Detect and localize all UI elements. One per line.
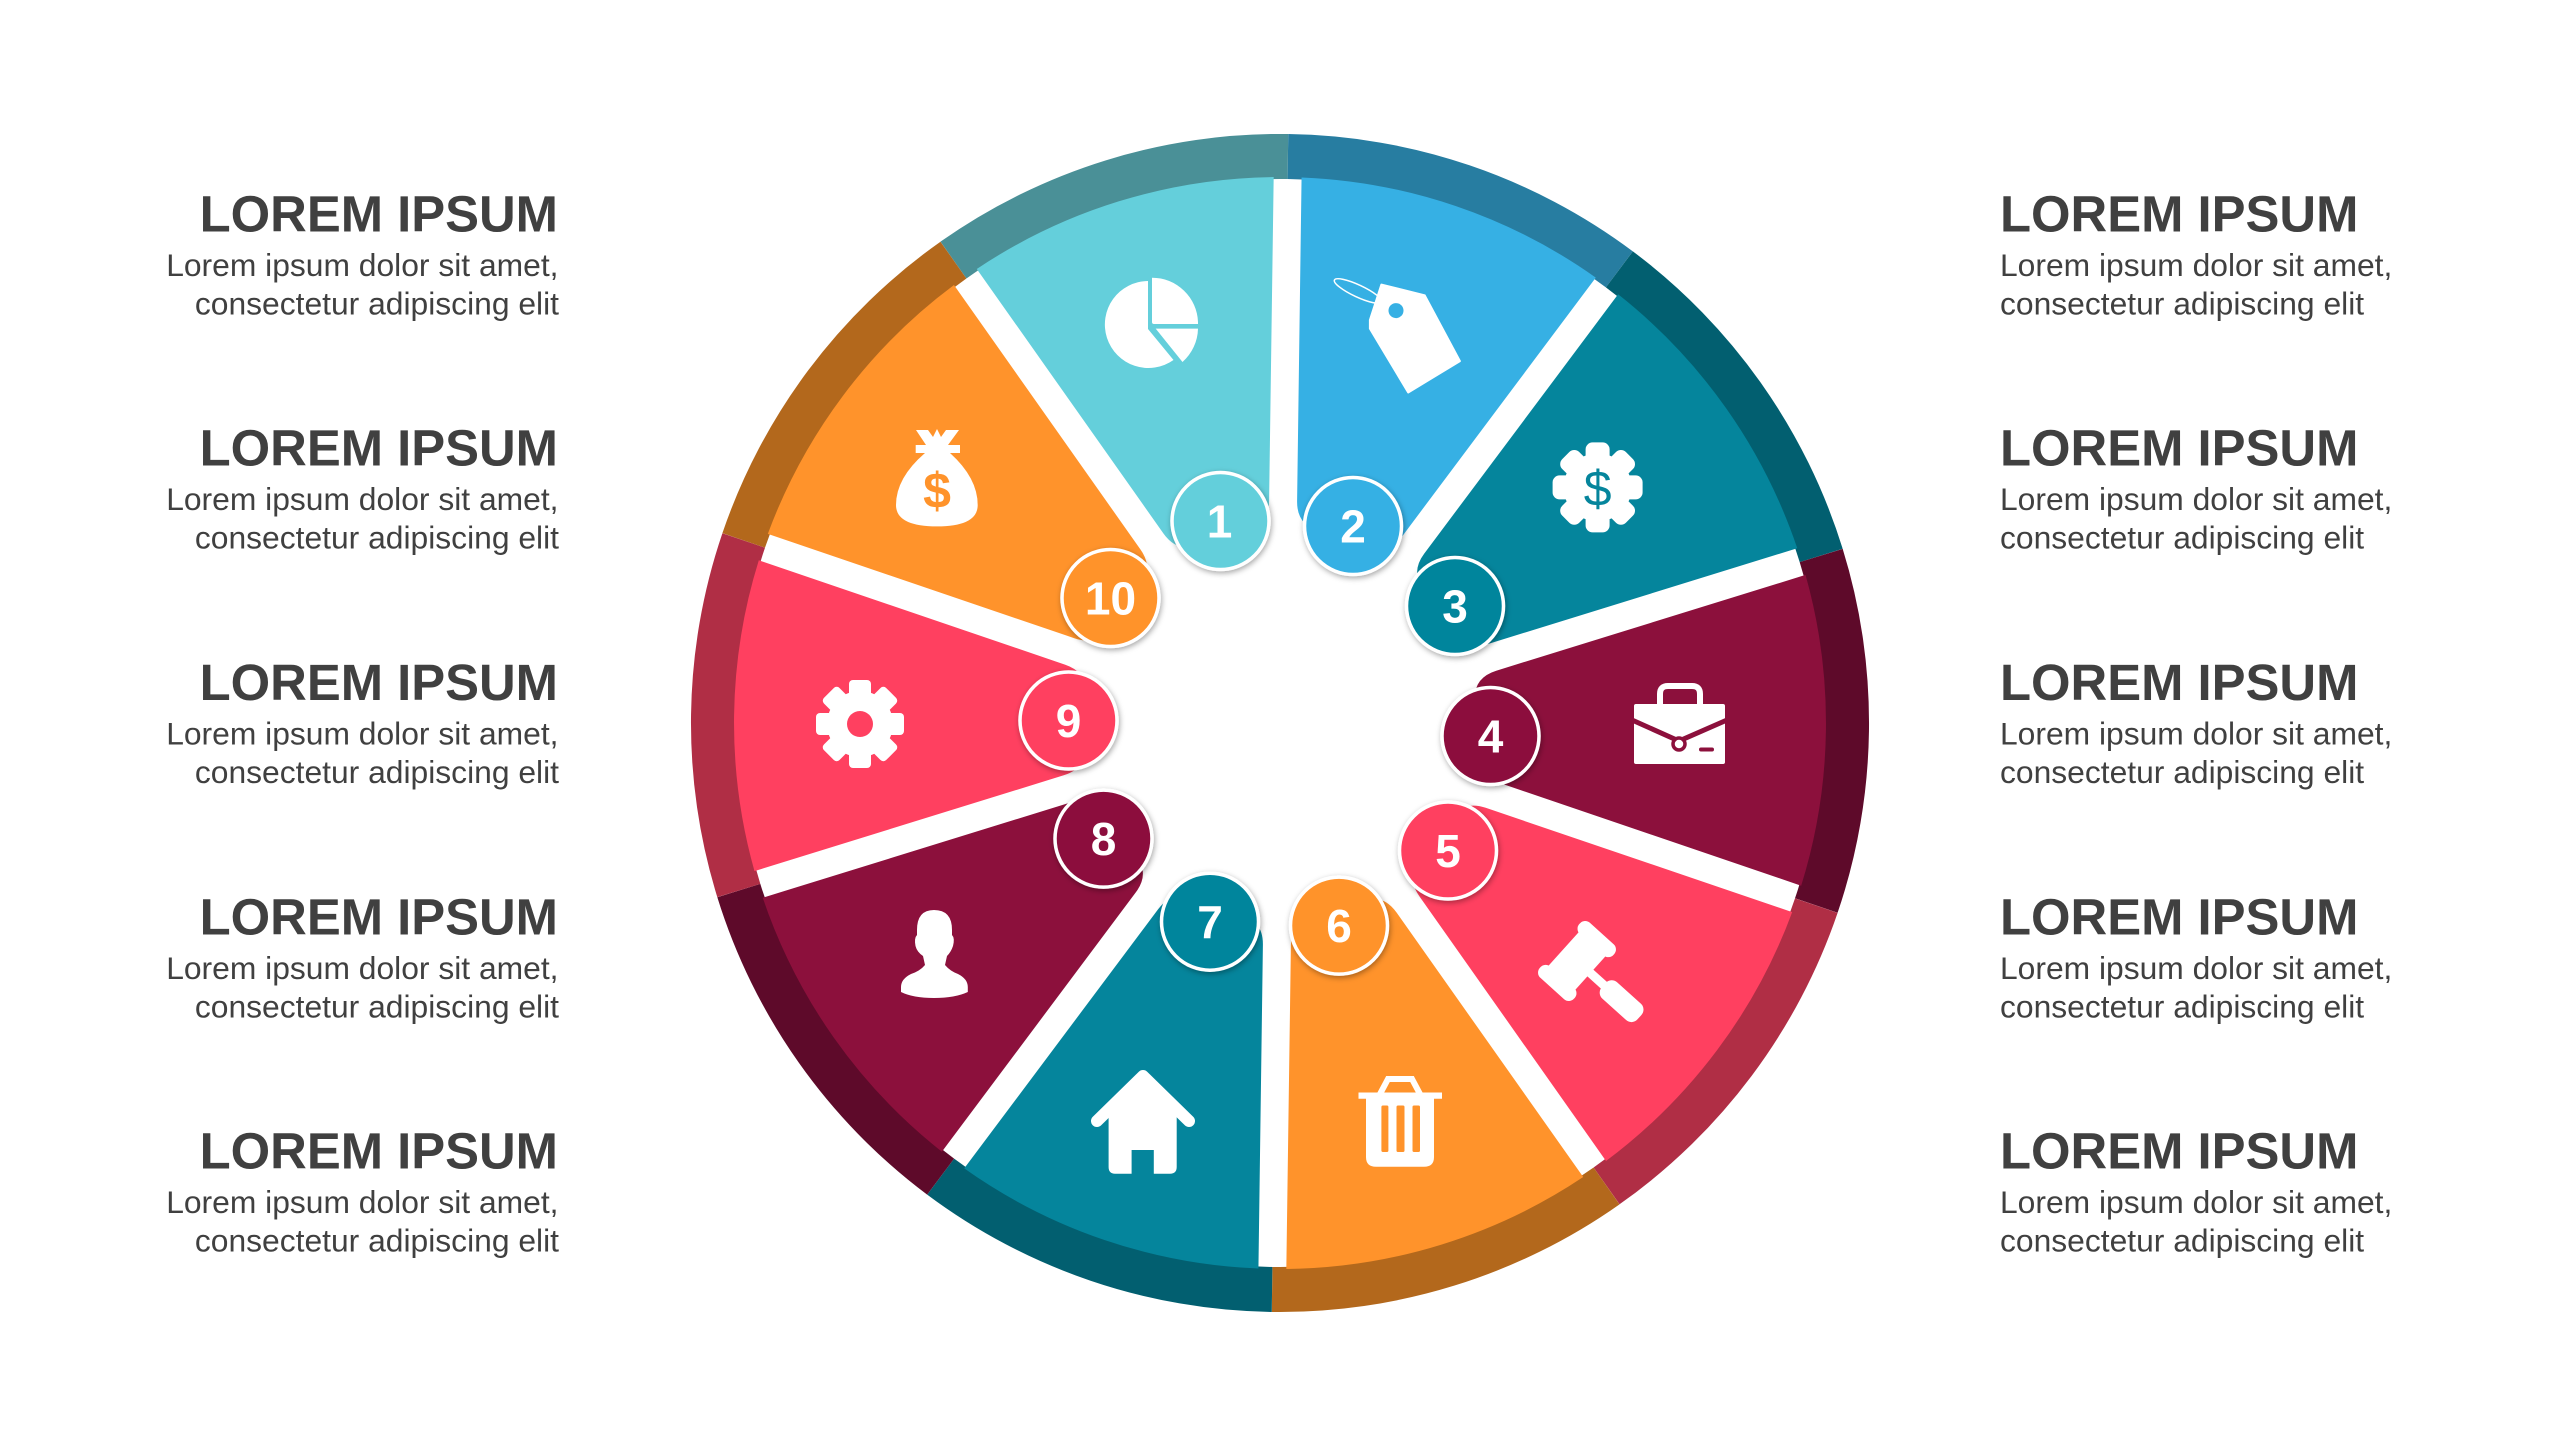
right text block 1	[2000, 186, 2392, 322]
number badge 6: 6	[1326, 900, 1352, 952]
wedge 10	[750, 272, 1217, 731]
left text block 2: Lorem ipsum dolor sit amet,	[166, 481, 558, 517]
icon: money bag: $	[923, 463, 951, 519]
number badge 9	[1020, 672, 1117, 769]
ring segment 5	[1585, 887, 1861, 1222]
wedge 9	[732, 560, 1088, 876]
ring segment 8	[694, 873, 962, 1211]
left text block 5: Lorem ipsum dolor sit amet,	[166, 1184, 558, 1220]
left text block 2: LOREM IPSUM	[200, 420, 558, 476]
ring segment 4	[1795, 548, 1872, 913]
number badge 4: 4	[1478, 710, 1504, 762]
right text block 2: Lorem ipsum dolor sit amet,	[2000, 481, 2392, 517]
ring segment 2	[1274, 107, 1642, 292]
left text block 3: Lorem ipsum dolor sit amet,	[166, 716, 558, 752]
number badge 6	[1290, 877, 1388, 974]
wedge 8	[744, 708, 1211, 1165]
ring segment 10	[699, 224, 975, 559]
right text block 1: Lorem ipsum dolor sit amet,	[2000, 247, 2392, 283]
number badge 8	[1055, 790, 1152, 887]
number badge 5	[1400, 802, 1496, 899]
number badge 8: 8	[1091, 813, 1116, 865]
number badge 9: 9	[1056, 695, 1081, 747]
number badge 3	[1406, 558, 1504, 654]
number badge 10: 10	[1085, 572, 1136, 624]
ring segment 1	[932, 106, 1301, 283]
icon: gavel	[1535, 918, 1664, 1045]
wedge panels	[732, 155, 1828, 1291]
icon: price tag	[1332, 275, 1460, 392]
icon: person	[901, 910, 968, 998]
wedge 1	[970, 155, 1371, 583]
right text block 4: LOREM IPSUM	[2000, 888, 2358, 946]
left text block 4: LOREM IPSUM	[200, 888, 558, 946]
right text block 4: Lorem ipsum dolor sit amet,	[2000, 950, 2392, 986]
icon: gear with dollar	[1553, 442, 1643, 532]
wedge 7	[957, 857, 1364, 1290]
number badge 4	[1442, 688, 1539, 784]
right text block 2: consectetur adipiscing elit	[2000, 520, 2364, 556]
wedge 6	[1189, 863, 1590, 1291]
right text block 3	[2000, 654, 2392, 790]
left text block 1: Lorem ipsum dolor sit amet,	[166, 247, 558, 283]
left text block 1	[166, 186, 559, 322]
right text block 5: LOREM IPSUM	[2000, 1122, 2358, 1180]
left text block 3	[166, 654, 559, 790]
number badge 2: 2	[1340, 500, 1366, 552]
number badge 7: 7	[1197, 896, 1223, 948]
ring segment 6	[1259, 1163, 1628, 1340]
right text block 3: LOREM IPSUM	[2000, 654, 2358, 711]
left text block 4: Lorem ipsum dolor sit amet,	[166, 950, 558, 986]
left text block 3: LOREM IPSUM	[200, 654, 558, 711]
number badge 5: 5	[1435, 825, 1461, 877]
outer ring	[688, 106, 1872, 1340]
left text block 5: consectetur adipiscing elit	[195, 1222, 559, 1258]
wedge 4	[1472, 570, 1828, 886]
right text block 5: Lorem ipsum dolor sit amet,	[2000, 1184, 2392, 1220]
icon: trash can	[1358, 1079, 1442, 1167]
left text block 5	[166, 1122, 559, 1258]
icon: pie chart	[1105, 278, 1198, 368]
right text block 2	[2000, 420, 2392, 556]
left text block 1: consectetur adipiscing elit	[195, 286, 559, 322]
left text block 1: LOREM IPSUM	[200, 186, 558, 242]
right text block 5: consectetur adipiscing elit	[2000, 1222, 2364, 1258]
icon: house	[1097, 1076, 1189, 1174]
wedge 3	[1349, 281, 1816, 738]
number badge 10	[1062, 550, 1159, 646]
icon: gear	[816, 680, 904, 768]
left text block 2	[166, 420, 559, 556]
right text block 4	[2000, 888, 2392, 1024]
number badge 1: 1	[1207, 496, 1232, 548]
left text block 5: LOREM IPSUM	[200, 1122, 558, 1180]
right text block 2: LOREM IPSUM	[2000, 420, 2358, 476]
wedge 5	[1343, 715, 1810, 1174]
right text block 4: consectetur adipiscing elit	[2000, 988, 2364, 1024]
number badge 2	[1304, 478, 1402, 574]
right text block 1: consectetur adipiscing elit	[2000, 286, 2364, 322]
right text block 3: Lorem ipsum dolor sit amet,	[2000, 716, 2392, 752]
number badge 1	[1172, 472, 1269, 570]
left text block 2: consectetur adipiscing elit	[195, 520, 559, 556]
number badge 7	[1162, 873, 1258, 970]
right text block 3: consectetur adipiscing elit	[2000, 754, 2364, 790]
left text block 4	[166, 888, 559, 1024]
right text block 5	[2000, 1122, 2392, 1258]
icon: briefcase	[1632, 686, 1727, 764]
icon: money bag	[896, 429, 978, 526]
right text block 1: LOREM IPSUM	[2000, 186, 2358, 242]
ring segment 3	[1598, 235, 1866, 573]
icon: gear with dollar: $	[1584, 460, 1612, 516]
left text block 3: consectetur adipiscing elit	[195, 754, 559, 790]
wedge 2	[1196, 156, 1603, 589]
ring segment 7	[918, 1154, 1286, 1339]
number badge 3: 3	[1442, 580, 1468, 632]
left text block 4: consectetur adipiscing elit	[195, 988, 559, 1024]
ring segment 9	[688, 533, 765, 898]
